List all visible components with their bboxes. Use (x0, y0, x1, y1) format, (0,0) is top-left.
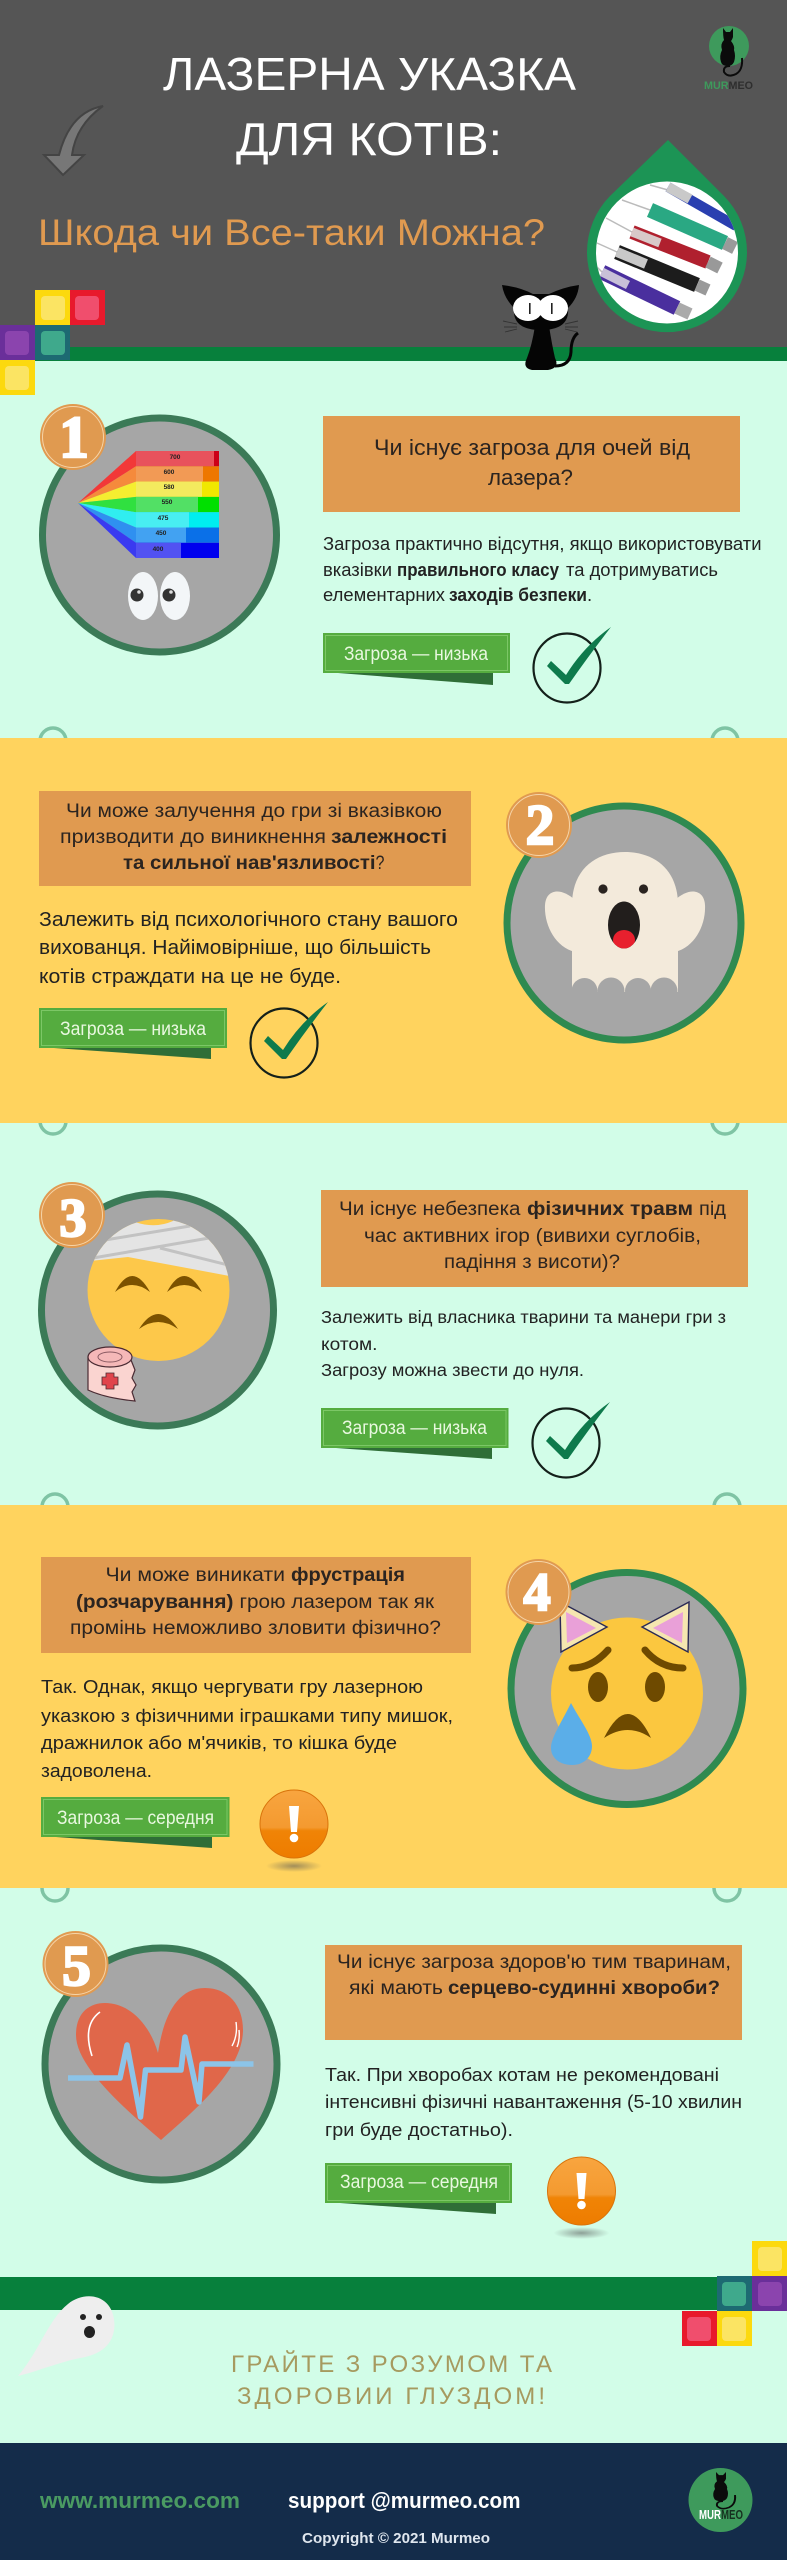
icon: check 3 (532, 1402, 610, 1478)
badge: threat medium 5: Загроза — середня (340, 2172, 498, 2193)
icon: rainbow spectrum: 600 (164, 469, 175, 476)
badge 5: 5 (62, 1935, 91, 1998)
footer panel (0, 2443, 787, 2560)
badge 2 (506, 792, 572, 858)
text block 3: Залежить від власника тварини та манери гри з (321, 1307, 726, 1327)
text block 1: елементарних (323, 584, 446, 605)
badge: threat medium 4: Загроза — середня (57, 1808, 214, 1829)
title: ДЛЯ КОТІВ: (236, 113, 502, 165)
question box 5: які мають (349, 1978, 443, 1999)
icon: drop with laser pointers (587, 140, 747, 332)
badge 3: 3 (60, 1188, 86, 1248)
text block 5 (325, 2064, 742, 2140)
text block 3 (321, 1307, 726, 1380)
icon: curved arrow (44, 106, 103, 175)
circle illustration 5 (45, 1948, 277, 2180)
badge: threat medium 5 (325, 2163, 512, 2214)
panel: section 1 (40, 404, 762, 702)
icon: bandage roll (88, 1347, 136, 1401)
panel: section 3 (39, 1182, 748, 1478)
icon: rainbow spectrum: 700 (170, 454, 181, 461)
website link: www.murmeo.com (39, 2488, 240, 2513)
badge: threat low 1: Загроза — низька (344, 644, 488, 665)
question box 2: та сильної нав'язливості (123, 853, 376, 874)
badge 2: 2 (526, 794, 554, 857)
closing message: ГРАЙТЕ З РОЗУМОМ ТА (231, 2350, 552, 2378)
badge 1 (40, 404, 106, 470)
question box 4: промінь неможливо зловити фізично? (70, 1618, 441, 1639)
text block 1: та дотримуватись (566, 559, 718, 580)
question box 3: фізичних травм (527, 1199, 693, 1220)
text block 4: дражнилок або м'ячиків, то кішка буде (41, 1732, 397, 1753)
icon: bandaged face (88, 1219, 230, 1361)
circle illustration 3 (42, 1194, 274, 1426)
text block 4 (41, 1676, 453, 1781)
text block 1: заходів безпеки (449, 584, 587, 605)
panel: section 5 (42, 1931, 742, 2239)
panel: section 2 (39, 791, 741, 1078)
question box 4: Чи може виникати (106, 1565, 285, 1586)
closing message (231, 2350, 552, 2410)
question box 1: Чи існує загроза для очей від (374, 435, 690, 460)
badge: threat low 3: Загроза — низька (342, 1418, 487, 1439)
green band bottom (0, 2277, 787, 2310)
icon: check 1 (534, 627, 611, 702)
question box 4 (41, 1557, 471, 1653)
question box 2: Чи може залучення до гри зі вказівкою (66, 801, 442, 822)
text block 2 (39, 909, 458, 988)
header green band (0, 347, 787, 361)
icon: rainbow spectrum: 475 (158, 515, 169, 522)
question box 4: (розчарування) (76, 1592, 234, 1613)
icon: check 2 (250, 1002, 328, 1078)
icon: eyes (128, 572, 190, 620)
panel: section 4 (41, 1557, 743, 1872)
question box 5: серцево-судинні хвороби? (448, 1978, 720, 1999)
text block 1 (323, 533, 762, 605)
logo: murmeo top (704, 26, 753, 92)
circle illustration 2 (507, 806, 741, 1040)
circle illustration 4 (511, 1572, 743, 1804)
question box 3 (321, 1190, 748, 1287)
icon: colored squares bottom-right (682, 2241, 787, 2346)
text block 5: Так. При хворобах котам не рекомендовані (325, 2064, 719, 2085)
icon: rainbow spectrum: 400 (153, 546, 164, 553)
text block 4: Так. Однак, якщо чергувати гру лазерною (41, 1676, 423, 1697)
icon: rainbow spectrum: 550 (162, 499, 173, 506)
rings behind yellow panel 1 (40, 728, 740, 1901)
badge 5 (42, 1931, 108, 1998)
badge 4: 4 (524, 1562, 550, 1622)
badge: threat low 1 (323, 633, 510, 685)
question box 3: під (699, 1199, 726, 1220)
badge 4 (506, 1559, 572, 1625)
title (163, 48, 576, 165)
text block 1: Загроза практично відсутня, якщо використовувати (323, 533, 762, 554)
question box 2: залежності (331, 827, 447, 848)
text block 2: котів страждати на це не буде. (39, 966, 341, 988)
icon: colored squares top-left (0, 290, 105, 395)
subtitle: Шкода чи Все-таки Можна? (38, 212, 545, 253)
text block 3: Загрозу можна звести до нуля. (321, 1360, 584, 1380)
circle illustration 1 (42, 418, 276, 652)
icon: rainbow spectrum: 450 (156, 530, 167, 537)
question box 5: Чи існує загроза здоров'ю тим тваринам, (337, 1952, 731, 1973)
text block 5: гри буде достатньо). (325, 2119, 513, 2140)
copyright: Copyright © 2021 Murmeo (302, 2530, 490, 2547)
question box 2: ? (376, 853, 384, 874)
icon: rainbow spectrum: 580 (164, 484, 175, 491)
question box 3: падіння з висоти)? (444, 1252, 620, 1273)
logo: murmeo footer: MURMEO (699, 2507, 743, 2522)
text block 2: вихованця. Найімовірніше, що більшість (39, 937, 431, 959)
question box 1 (323, 416, 740, 512)
question box 2: призводити до виникнення (60, 827, 326, 848)
logo: murmeo top: MURMEO (704, 80, 753, 92)
text block 2: Залежить від психологічного стану вашого (39, 909, 458, 931)
logo: murmeo footer (688, 2468, 752, 2532)
text block 5: інтенсивні фізичні навантаження (5-10 хвилин (325, 2091, 742, 2112)
text block 1: . (587, 584, 592, 605)
badge 3 (39, 1182, 105, 1248)
icon: ghost (545, 852, 705, 1004)
header panel (0, 0, 787, 361)
text block 3: котом. (321, 1334, 378, 1354)
icon: small ghost (18, 2296, 114, 2376)
question box 3: Чи існує небезпека (339, 1199, 521, 1220)
badge: threat medium 4 (41, 1797, 230, 1848)
badge: threat low 3 (321, 1408, 508, 1459)
question box 3: час активних ігор (вивихи суглобів, (364, 1226, 701, 1247)
panel: section 4 background (0, 1505, 787, 1888)
support email: support @murmeo.com (288, 2488, 520, 2513)
text block 4: задоволена. (41, 1760, 152, 1781)
badge 1: 1 (59, 404, 89, 470)
closing message: ЗДОРОВИИ ГЛУЗДОМ! (237, 2383, 545, 2410)
question box 5 (325, 1945, 742, 2040)
badge: threat low 2 (39, 1008, 227, 1059)
icon: warning 4 (260, 1790, 328, 1872)
text block 1: вказівки (323, 559, 392, 580)
panel: section 2 background (0, 738, 787, 1123)
question box 1: лазера? (488, 465, 573, 490)
badge: threat low 2: Загроза — низька (60, 1019, 206, 1040)
icon: warning 5 (548, 2157, 616, 2239)
text block 1: правильного класу (397, 559, 560, 580)
icon: sad cat face (551, 1602, 703, 1770)
text block 4: указкою з фізичними іграшками типу мишок, (41, 1705, 453, 1726)
icon: black cat (502, 285, 579, 370)
question box 4: фрустрація (291, 1565, 405, 1586)
icon: rainbow spectrum (78, 451, 219, 558)
question box 2 (39, 791, 471, 886)
icon: heart with pulse (68, 1988, 254, 2140)
question box 4: грою лазером так як (240, 1592, 435, 1613)
title: ЛАЗЕРНА УКАЗКА (163, 48, 576, 100)
